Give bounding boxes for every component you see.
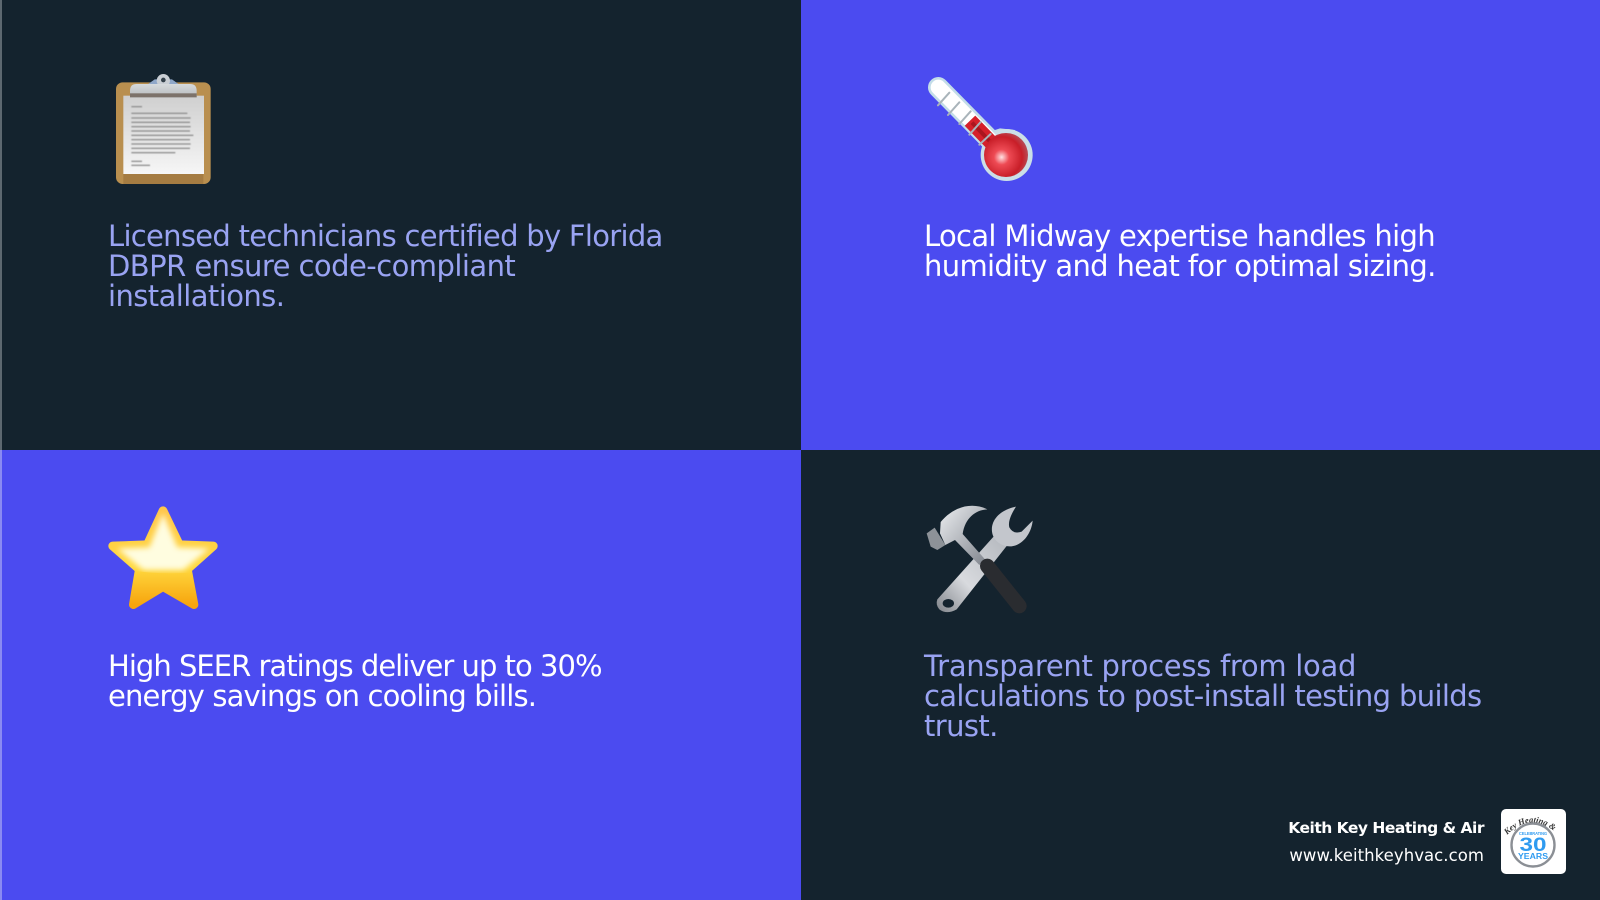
text: transparent process: trust. — [924, 709, 998, 743]
brand name: Keith Key Heating & Air — [1288, 819, 1484, 837]
text: local expertise: Local Midway expertise handles high — [924, 219, 1435, 253]
icon: clipboard — [116, 74, 211, 184]
left edge strip — [0, 0, 2, 900]
logo badge — [1501, 809, 1566, 874]
text: transparent process: Transparent process from load — [924, 649, 1356, 683]
logo badge: CELEBRATING — [1519, 831, 1547, 836]
text: licensed technicians: DBPR ensure code-compliant — [108, 249, 515, 283]
text: local expertise — [924, 219, 1436, 283]
logo badge: Key Heating & — [1504, 817, 1556, 835]
brand url: www.keithkeyhvac.com — [1289, 846, 1484, 865]
logo badge: 30 — [1520, 835, 1546, 856]
text: licensed technicians — [108, 219, 663, 313]
text: energy savings — [108, 649, 602, 713]
icon: thermometer — [928, 77, 1033, 181]
panel: local expertise — [801, 0, 1600, 450]
icon: hammer and wrench — [926, 506, 1033, 614]
text: licensed technicians: installations. — [108, 279, 284, 313]
panel: energy savings — [2, 450, 801, 900]
text: local expertise: humidity and heat for optimal sizing. — [924, 249, 1436, 283]
text: energy savings: energy savings on cooling bills. — [108, 679, 536, 713]
text: transparent process — [924, 649, 1481, 743]
icon: star — [108, 506, 218, 609]
panel: transparent process — [801, 450, 1600, 900]
logo badge: YEARS — [1518, 852, 1549, 861]
brand block — [1288, 809, 1566, 874]
text: energy savings: High SEER ratings deliver up to 30% — [108, 649, 602, 683]
panel: licensed technicians — [2, 0, 801, 450]
text: licensed technicians: Licensed technicians certified by Florida — [108, 219, 663, 253]
text: transparent process: calculations to post-install testing builds — [924, 679, 1481, 713]
